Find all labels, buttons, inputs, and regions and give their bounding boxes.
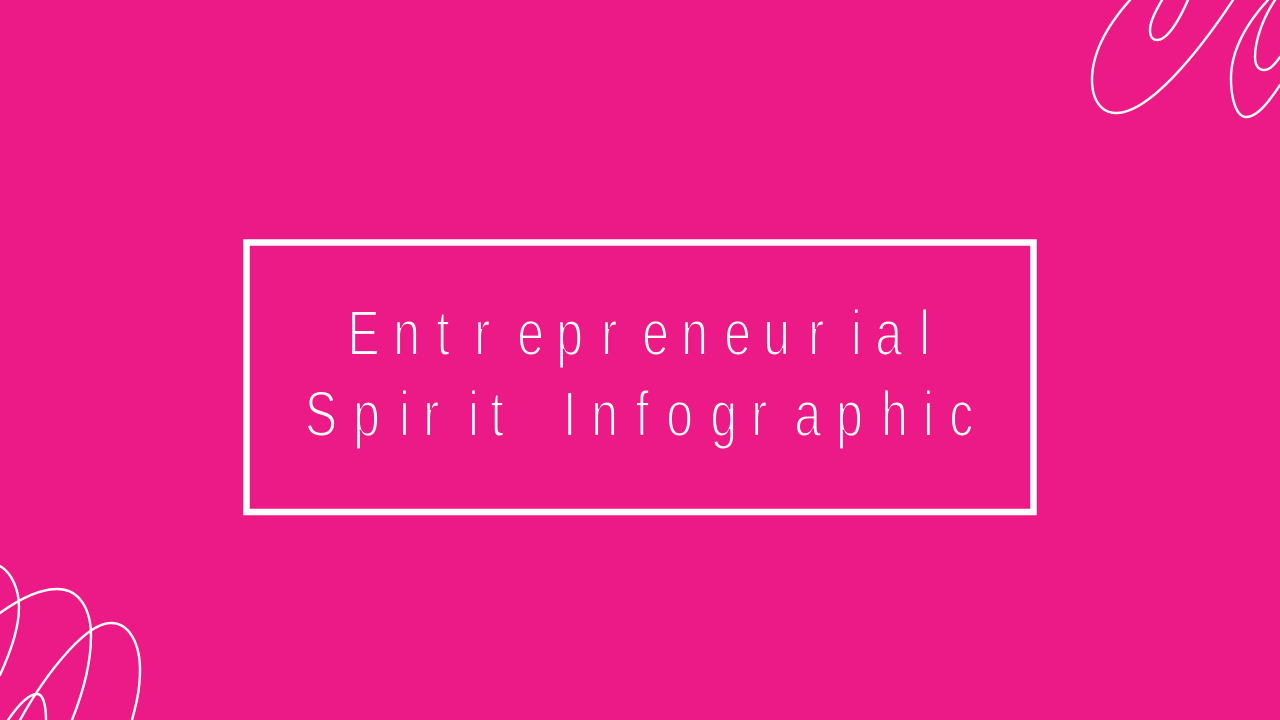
decorative scribble: top right bbox=[1092, 0, 1280, 117]
decorative scribble: bottom left bbox=[0, 566, 140, 720]
title line 2: Spirit Infographic bbox=[305, 378, 973, 450]
title frame bbox=[246, 242, 1034, 512]
title bbox=[305, 297, 973, 450]
title line 1: Entrepreneurial bbox=[347, 297, 930, 369]
